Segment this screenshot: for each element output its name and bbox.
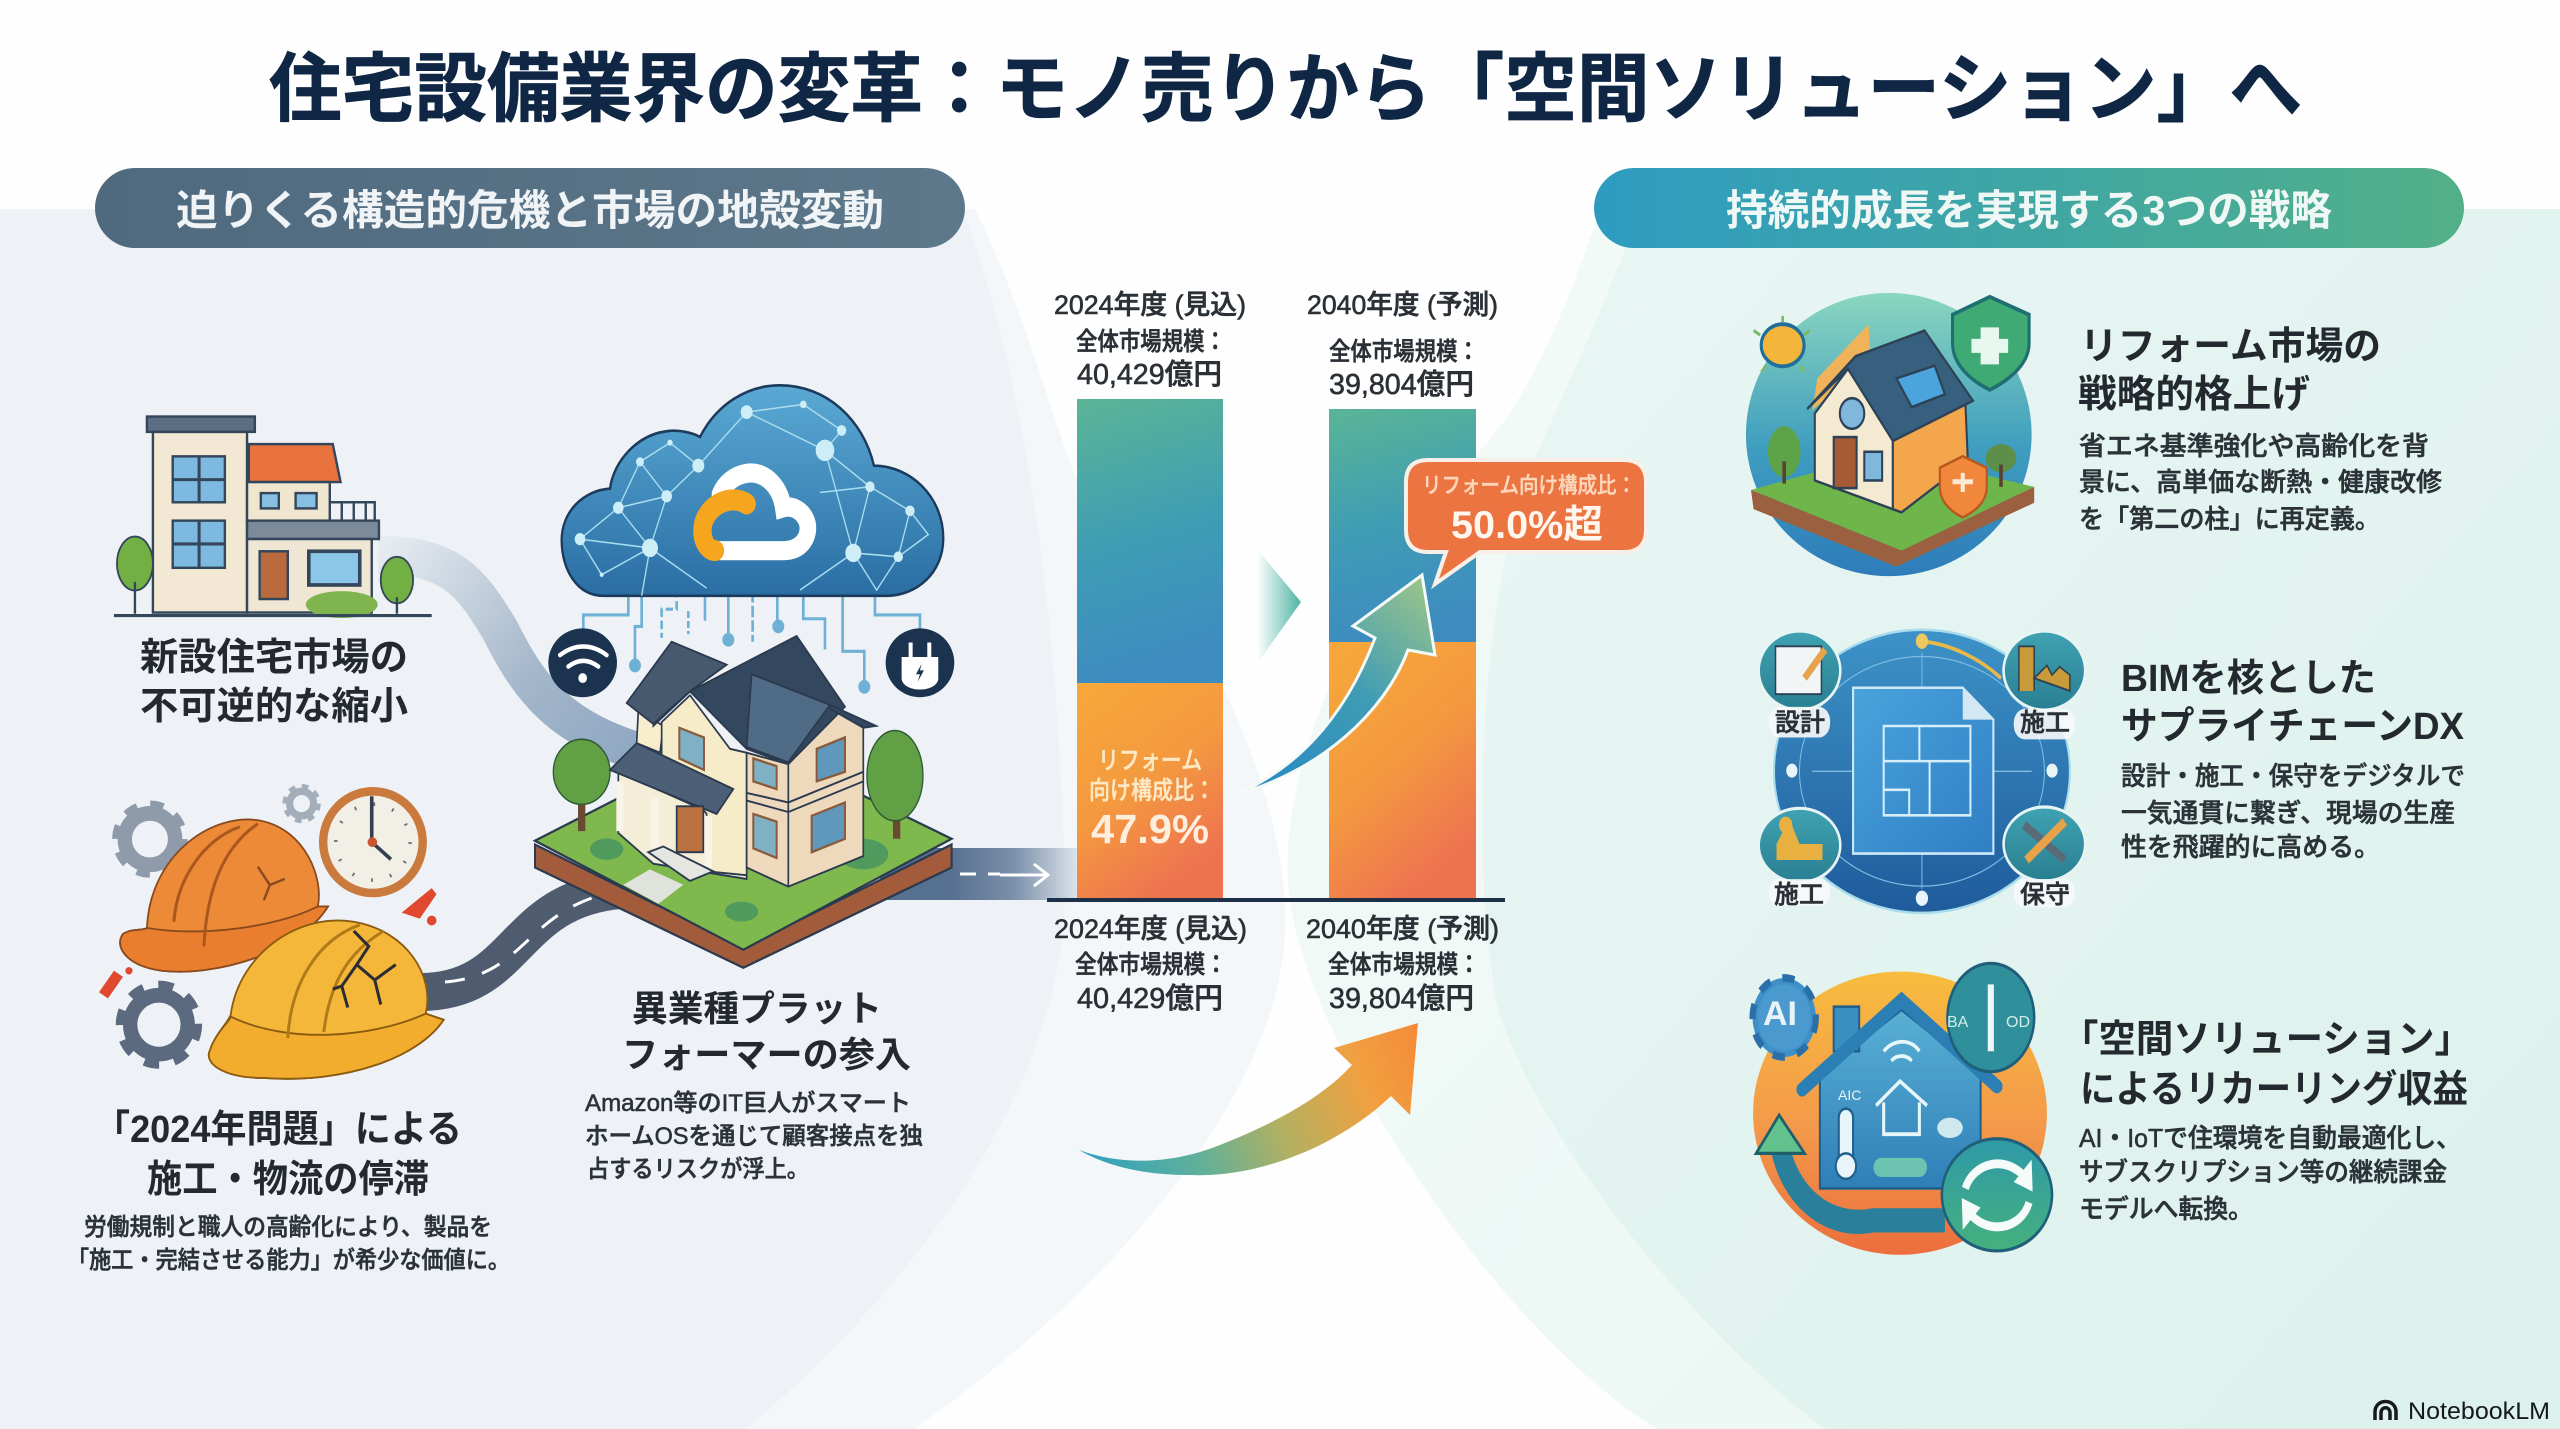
text block: space solution description — [2079, 1123, 2461, 1224]
title: 住宅設備業界の変革：モノ売りから「空間ソリューション」へ — [269, 47, 2302, 131]
heading: BIM supply chain: BIMを核とした — [2121, 658, 2376, 700]
text block: space solution description: モデルへ転換。 — [2079, 1194, 2253, 1224]
icon: yellow helmet — [209, 920, 444, 1079]
text block: platformer description: ホームOSを通じて顧客接点を独 — [585, 1123, 923, 1150]
icon text: AIC: AIC — [1838, 1087, 1861, 1103]
icon: dark gear — [121, 985, 197, 1064]
bar 2040: reform segment — [1329, 642, 1476, 898]
heading: new housing market: 不可逆的な縮小 — [140, 686, 408, 728]
icon: refresh badge — [1942, 1139, 2052, 1251]
bar label: 47.9% — [1089, 747, 1215, 852]
icon: small gear — [285, 786, 318, 821]
bar label: 47.9%: リフォーム — [1098, 747, 1202, 775]
text block: BIM description — [2121, 761, 2465, 862]
callout: 50% share: リフォーム向け構成比： — [1422, 473, 1636, 498]
left section header pill — [95, 168, 965, 248]
top label 2040 — [1307, 290, 1498, 401]
connector ribbon: building to platform house — [378, 555, 650, 755]
logo: NotebookLM: NotebookLM — [2408, 1398, 2550, 1425]
icon: new housing building — [114, 417, 432, 618]
panel background: right strategy side (outer) — [1288, 209, 2560, 1429]
text block: 2024 problem description — [67, 1214, 510, 1274]
platform soil — [535, 845, 952, 968]
text block: BIM description: 性を飛躍的に高める。 — [2121, 832, 2380, 862]
heading: platformer entry — [622, 988, 911, 1075]
node: design — [1759, 631, 1840, 738]
heading: reform market: 戦略的格上げ — [2078, 374, 2310, 416]
text block: BIM description: 設計・施工・保守をデジタルで — [2121, 761, 2465, 791]
callout: 50% share — [1406, 460, 1646, 584]
bar 2040: other segment — [1329, 409, 1476, 643]
bottom label 2040: 2040年度 (予測) — [1306, 914, 1499, 944]
icon: BIM blueprint hub — [1759, 630, 2085, 913]
cloud connector lines — [583, 577, 920, 686]
icon: gauge circle — [1947, 963, 2034, 1072]
icon text: gauge labels: OD — [2006, 1014, 2030, 1031]
network nodes and lines — [580, 404, 928, 596]
text block: reform market description: 省エネ基準強化や高齢化を背 — [2079, 431, 2429, 461]
top label 2040: 39,804億円 — [1329, 368, 1474, 401]
icon: house on platform — [610, 636, 876, 887]
node labels: 設計 — [1775, 709, 1825, 737]
right section header pill: 持続的成長を実現する3つの戦略 — [1726, 187, 2332, 234]
cloud logo — [702, 473, 808, 551]
text block: space solution description: AI・IoTで住環境を自動最適化し、 — [2079, 1123, 2461, 1153]
text block: platformer description — [585, 1090, 923, 1183]
icon text: gauge labels — [1947, 1014, 2030, 1031]
text block: reform market description: を「第二の柱」に再定義。 — [2079, 504, 2380, 534]
heading: reform market: リフォーム市場の — [2080, 326, 2381, 368]
text block: 2024 problem description: 「施工・完結させる能力」が希少な価値に。 — [67, 1247, 510, 1274]
right section header pill — [1594, 168, 2464, 248]
heading: platformer entry: 異業種プラット — [632, 988, 882, 1029]
bottom label 2040: 全体市場規模： — [1328, 951, 1480, 979]
icon: grey gear — [116, 805, 183, 873]
bottom label 2024: 2024年度 (見込) — [1054, 914, 1247, 944]
top label 2024 — [1054, 290, 1246, 391]
icon: cloud network above house — [535, 385, 954, 968]
heading: 2024 problem: 「2024年問題」による — [94, 1109, 462, 1151]
platform lawn — [535, 768, 952, 950]
top label 2040: 2040年度 (予測) — [1307, 290, 1498, 320]
heading: platformer entry: フォーマーの参入 — [622, 1034, 911, 1075]
text block: platformer description: Amazon等のIT巨人がスマート — [585, 1090, 911, 1117]
icon: red warning marks — [99, 888, 436, 998]
panel background: right strategy side (inner) — [1482, 209, 2560, 1429]
shield: green — [1953, 297, 2029, 390]
arrow: bottom growth curve — [1079, 1023, 1418, 1175]
icon text: AI: AI — [1763, 995, 1797, 1033]
icon: smart home space solution — [1753, 963, 2052, 1255]
heading: 2024 problem — [94, 1109, 462, 1201]
node labels — [1774, 709, 2070, 909]
panel background: left crisis side (outer) — [0, 209, 1285, 1429]
connector road: platform house to chart — [880, 848, 1078, 900]
reform house body — [1807, 331, 1973, 512]
icon: reform house — [1746, 293, 2034, 576]
bar 2024: other segment — [1077, 399, 1223, 683]
node labels: 施工 — [1774, 881, 1824, 909]
heading: space solution: 「空間ソリューション」 — [2061, 1019, 2472, 1061]
arrow: triangle between bars — [1257, 549, 1301, 661]
bar label: 47.9%: 47.9% — [1091, 806, 1209, 852]
bottom label 2040: 39,804億円 — [1329, 982, 1474, 1015]
bottom label 2024 — [1054, 914, 1247, 1015]
sun — [1754, 316, 1810, 372]
shield: orange — [1940, 456, 1987, 517]
heading: 2024 problem: 施工・物流の停滞 — [147, 1159, 429, 1201]
heading: new housing market: 新設住宅市場の — [140, 637, 408, 679]
left section header pill: 迫りくる構造的危機と市場の地殻変動 — [176, 187, 884, 234]
icon: loop arrow — [1756, 1115, 1945, 1222]
bottom label 2024: 40,429億円 — [1077, 982, 1223, 1015]
icon: wifi badge — [548, 628, 617, 697]
icon: orange helmet — [120, 820, 328, 972]
icon: cracked helmets, gears and clock — [99, 786, 444, 1079]
heading: space solution — [2061, 1019, 2472, 1111]
node: construction factory — [2004, 631, 2085, 739]
text block: 2024 problem description: 労働規制と職人の高齢化により、製品を — [84, 1214, 492, 1241]
bottom label 2024: 全体市場規模： — [1075, 951, 1227, 979]
top label 2024: 全体市場規模： — [1076, 328, 1226, 356]
heading: new housing market — [140, 637, 408, 728]
connector road: helmets to platform house — [420, 885, 700, 992]
icon: AI gear — [1753, 978, 1816, 1057]
chart: stacked bars 2024 vs 2040 — [1047, 399, 1505, 902]
text block: platformer description: 占するリスクが浮上。 — [587, 1156, 809, 1183]
node: maintenance tools — [2004, 807, 2085, 907]
node labels: 保守 — [2020, 881, 2070, 909]
chart baseline — [1047, 898, 1505, 902]
heading: space solution: によるリカーリング収益 — [2080, 1069, 2468, 1111]
heading: BIM supply chain: サプライチェーンDX — [2121, 706, 2465, 748]
node labels: 施工 — [2020, 709, 2070, 737]
text block: reform market description: 景に、高単価な断熱・健康改修 — [2079, 467, 2442, 497]
text block: reform market description — [2079, 431, 2442, 534]
callout: 50% share: 50.0%超 — [1451, 504, 1603, 547]
node: construction worker — [1759, 808, 1840, 906]
panel background: left crisis side (inner) — [0, 209, 1065, 1429]
heading: reform market — [2078, 326, 2381, 416]
text block: BIM description: 一気通貫に繋ぎ、現場の生産 — [2121, 798, 2455, 828]
bar label: 47.9%: 向け構成比： — [1089, 777, 1215, 805]
text block: space solution description: サブスクリプション等の継続課金 — [2079, 1157, 2447, 1187]
icon: plug badge — [886, 628, 954, 697]
blueprint document — [1853, 688, 1993, 854]
top label 2040: 全体市場規模： — [1329, 338, 1479, 366]
arrow: growth curve across bars — [1234, 575, 1435, 795]
icon: clock — [323, 791, 423, 893]
icon: trees on platform — [553, 731, 923, 921]
heading: BIM supply chain — [2121, 658, 2465, 748]
cloud — [562, 385, 943, 596]
smart home body — [1820, 1010, 1981, 1188]
bottom label 2040 — [1306, 914, 1499, 1015]
bar 2024: reform segment — [1077, 683, 1223, 898]
top label 2024: 40,429億円 — [1077, 358, 1222, 391]
icon text: gauge labels: BA — [1947, 1014, 1969, 1031]
top label 2024: 2024年度 (見込) — [1054, 290, 1246, 320]
